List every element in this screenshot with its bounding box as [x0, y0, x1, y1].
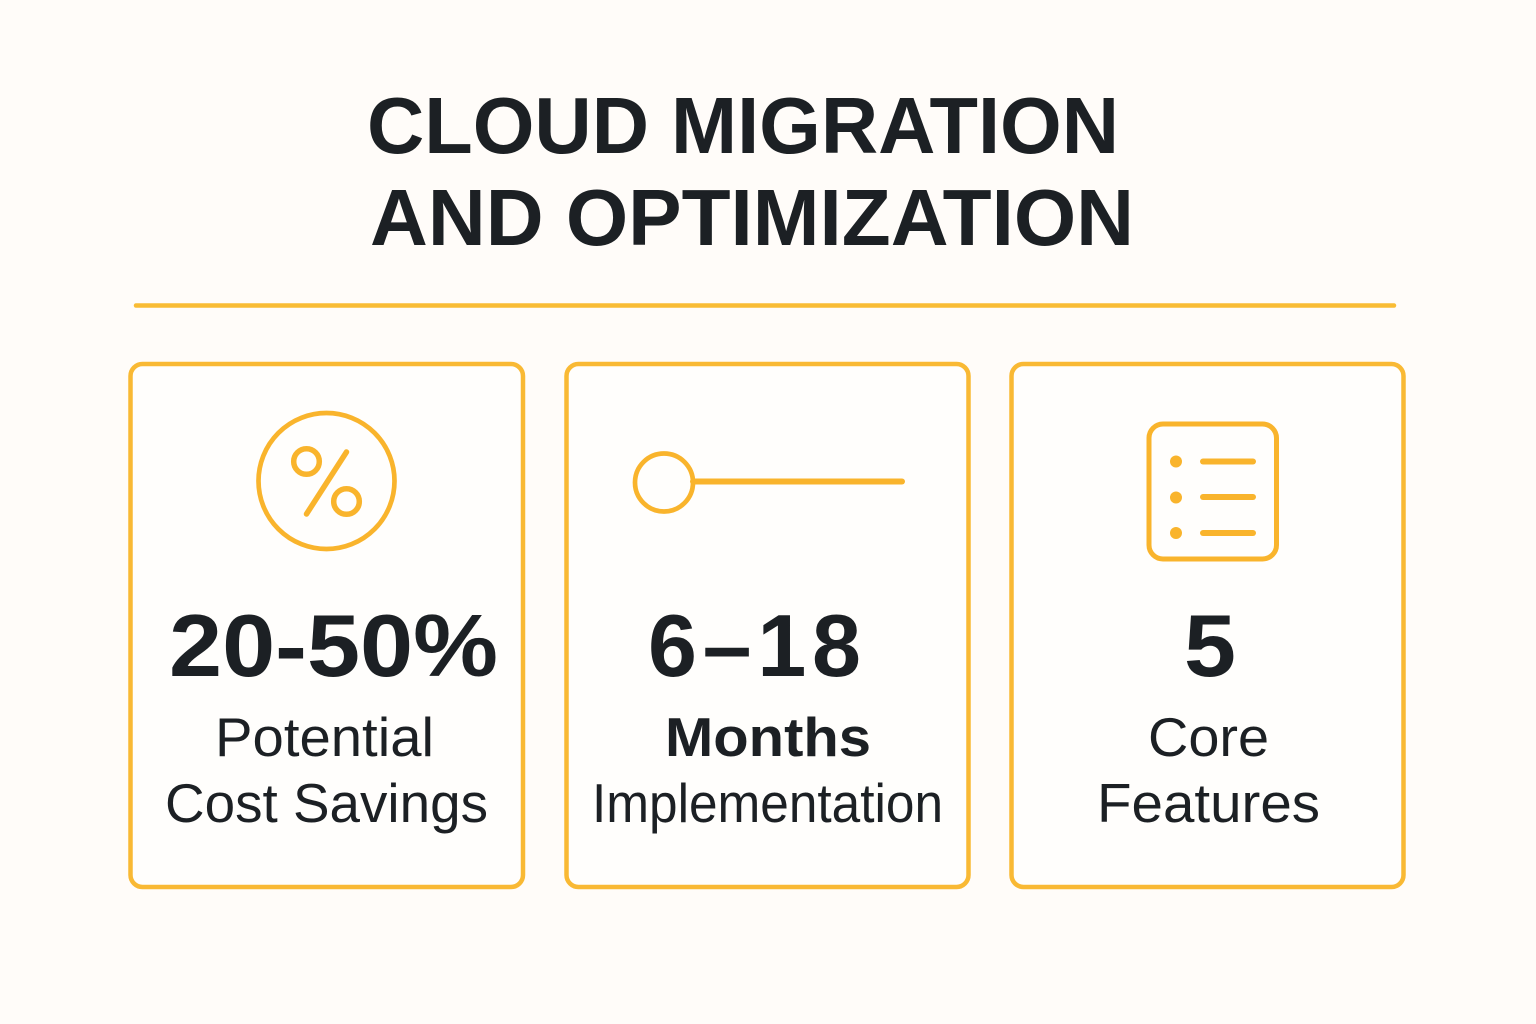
icon: timeline slider: [635, 454, 902, 512]
stat: 5: 5: [1184, 596, 1236, 695]
stat: 20-50%: 20-50%: [169, 596, 498, 695]
panel: core features: [1012, 364, 1404, 887]
title: CLOUD MIGRATION: [367, 81, 1119, 170]
label: potential cost savings: Potential: [215, 706, 434, 768]
label: core features: [1097, 706, 1320, 834]
title: AND OPTIMIZATION: [370, 173, 1134, 262]
label: core features: Features: [1097, 772, 1320, 834]
panel: cost savings: [130, 364, 523, 887]
icon: checklist: [1149, 424, 1276, 559]
stat: 6-18: 6–18: [648, 596, 861, 695]
label: potential cost savings: Cost Savings: [165, 772, 488, 834]
label: months implementation: [592, 706, 943, 834]
label: potential cost savings: [165, 706, 488, 834]
label: core features: Core: [1148, 706, 1269, 768]
panel: implementation timeline: [566, 364, 968, 887]
icon: percent: [258, 413, 394, 549]
title: [367, 81, 1134, 262]
label: months implementation: Implementation: [592, 772, 943, 834]
label: months implementation: Months: [665, 706, 871, 768]
